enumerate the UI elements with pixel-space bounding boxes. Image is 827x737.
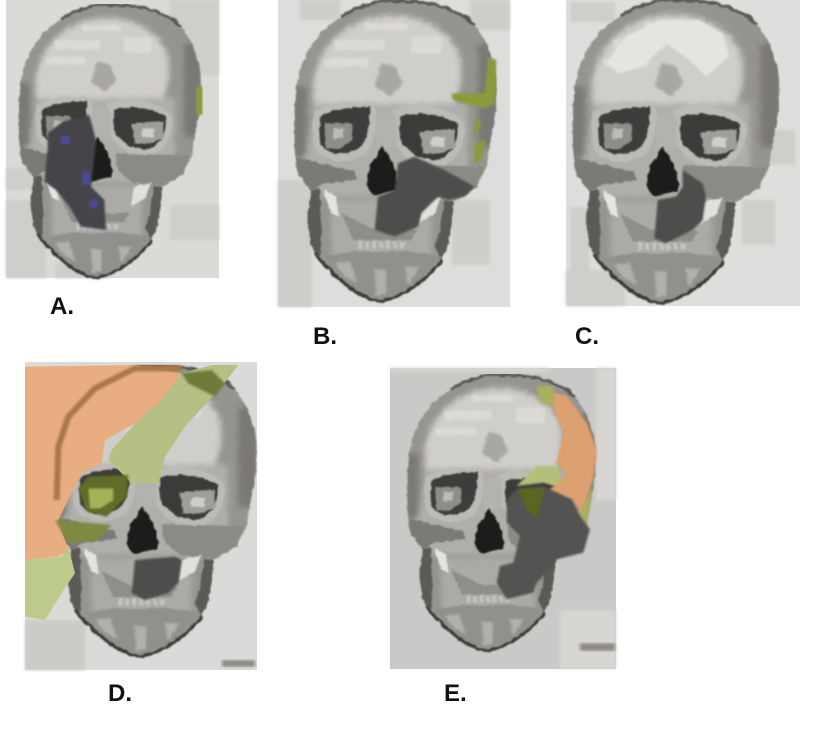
blue marks A bbox=[61, 136, 98, 207]
green orbit D bbox=[78, 475, 128, 517]
shaded region B bbox=[375, 157, 475, 237]
skull E illustration bbox=[404, 375, 597, 651]
green lower-left region D bbox=[25, 547, 75, 620]
panel B background bbox=[278, 0, 510, 307]
skull A illustration bbox=[16, 5, 202, 278]
panel C: skull with dark lower midface bbox=[566, 0, 800, 306]
orange region E bbox=[543, 393, 597, 513]
green top region E bbox=[537, 386, 593, 526]
orbit highlight D bbox=[88, 488, 113, 508]
shaded region C bbox=[654, 170, 706, 243]
label D: D. bbox=[108, 680, 132, 707]
panel E background bbox=[390, 368, 616, 669]
olive orbit patch E bbox=[518, 489, 545, 518]
green tint A bbox=[196, 87, 203, 115]
green brow region E bbox=[517, 466, 567, 489]
shaded and highlight regions C bbox=[606, 20, 729, 243]
panel B: skull with dark right midface and green temple bbox=[278, 0, 510, 307]
shaded region A bbox=[44, 87, 203, 230]
background mottling B bbox=[278, 0, 510, 307]
skull C illustration bbox=[570, 0, 781, 304]
forehead highlight C bbox=[606, 20, 729, 77]
coloured regions E bbox=[497, 386, 597, 599]
brown skull edge D bbox=[57, 368, 182, 500]
label A: A. bbox=[50, 293, 74, 320]
green area B bbox=[451, 57, 496, 163]
shaded region E bbox=[497, 486, 590, 599]
signature E bbox=[580, 643, 615, 651]
panel A background bbox=[6, 0, 219, 278]
background mottling A bbox=[6, 0, 219, 278]
panel C background bbox=[566, 0, 800, 306]
background mottling D bbox=[25, 620, 85, 670]
signature D bbox=[222, 660, 255, 667]
orange region D bbox=[25, 365, 182, 560]
label C: C. bbox=[575, 323, 599, 350]
background mottling E bbox=[390, 368, 616, 669]
label B: B. bbox=[313, 323, 337, 350]
panel E: skull with orange temple and dark cheek bbox=[390, 368, 616, 669]
shaded region D bbox=[132, 557, 182, 600]
background mottling C bbox=[566, 2, 795, 306]
green cheekbone D bbox=[55, 520, 112, 543]
coloured regions D bbox=[25, 365, 238, 620]
green forehead region D bbox=[108, 365, 238, 483]
skull B illustration bbox=[291, 1, 498, 302]
shaded and green regions B bbox=[375, 57, 496, 237]
dark green temple D bbox=[182, 370, 225, 397]
panel D background bbox=[25, 362, 257, 670]
panel D: skull with orange and green regions bbox=[25, 362, 258, 670]
label E: E. bbox=[444, 680, 467, 707]
skull D illustration bbox=[51, 366, 258, 657]
panel A: skull with dark left orbit and cheek bbox=[6, 0, 219, 278]
